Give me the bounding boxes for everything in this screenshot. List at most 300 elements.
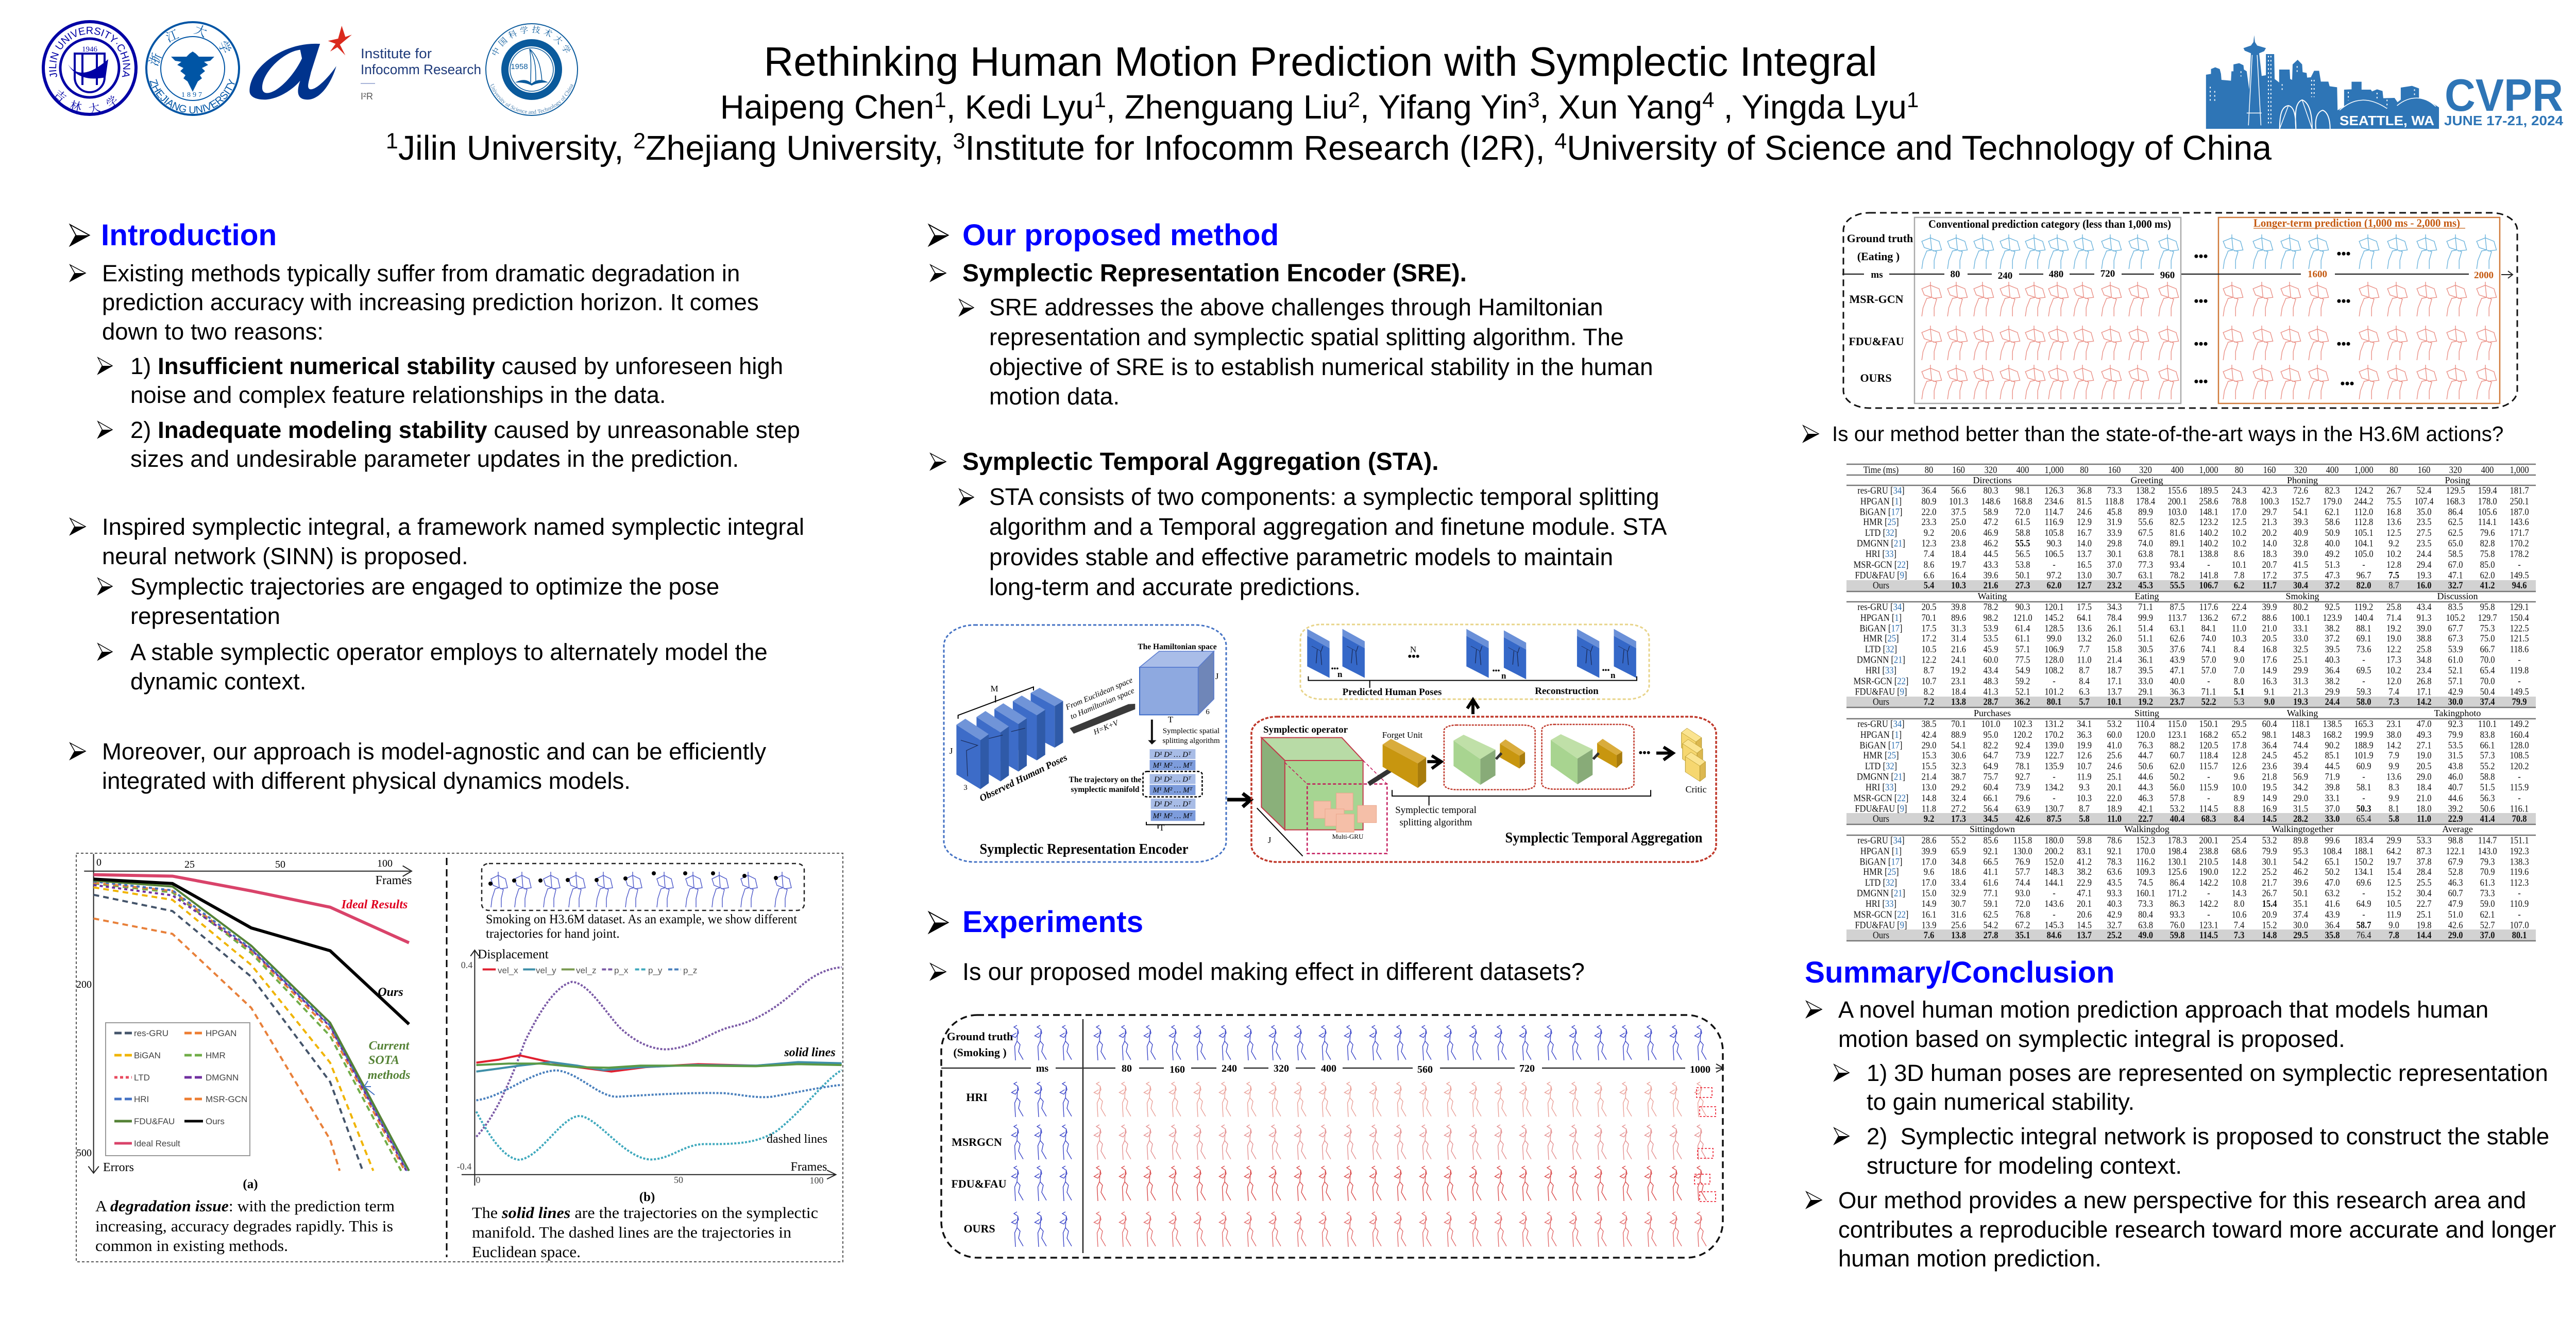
table chrome: rules, grey rows and category names: Purchases xyxy=(1974,708,2011,718)
table: sittingdown walkingdog walkingtogether average: 86.3 xyxy=(2170,898,2184,909)
text block: operator: A stable symplectic operator employs to alternately model the xyxy=(130,639,768,665)
table: purchases sitting walking takingphoto: 13.0 xyxy=(1922,782,1936,793)
table chrome: rules, grey rows and category names: Greeting xyxy=(2131,475,2163,485)
panel: symplectic representation encoder: M xyxy=(990,684,998,694)
table: sittingdown walkingdog walkingtogether average: 41.6 xyxy=(2325,898,2340,909)
table: directions greeting phoning posing: 143.6 xyxy=(2510,516,2529,528)
table: waiting eating smoking discussion: HMR [25] xyxy=(1863,633,1899,644)
table: directions greeting phoning posing: 8.6 xyxy=(1924,559,1934,570)
table: purchases sitting walking takingphoto: 130.7 xyxy=(2044,803,2064,814)
authors: , Xun Yang xyxy=(1539,88,1702,126)
table: purchases sitting walking takingphoto: 14.9 xyxy=(2262,792,2277,803)
table: time header: 160 xyxy=(2263,464,2276,475)
table: directions greeting phoning posing: 138.2 xyxy=(2136,485,2155,496)
table: waiting eating smoking discussion: 7.3 xyxy=(2388,696,2399,707)
table: purchases sitting walking takingphoto: 108.5 xyxy=(2510,750,2529,761)
panel: symplectic representation encoder: D¹ D² … Dᵀ xyxy=(1154,751,1192,759)
table: sittingdown walkingdog walkingtogether average: 33.4 xyxy=(1951,877,1966,888)
table: directions greeting phoning posing: 62.1 xyxy=(2325,506,2340,517)
table chrome: rules, grey rows and category names: Discussion xyxy=(2437,591,2478,601)
table: purchases sitting walking takingphoto: 39.8 xyxy=(2325,782,2340,793)
text block: operator xyxy=(130,639,768,695)
subheading: SRE: Symplectic Representation Encoder (SRE). xyxy=(962,260,1467,287)
table: sittingdown walkingdog walkingtogether average: 61.3 xyxy=(2480,877,2495,888)
table: directions greeting phoning posing: 81.5 xyxy=(2077,495,2092,506)
panel: predicted poses and reconstruction: Predicted Human Poses xyxy=(1343,687,1442,698)
text block: reason two xyxy=(130,417,800,472)
table: purchases sitting walking takingphoto: 58.1 xyxy=(2357,782,2371,793)
table: directions greeting phoning posing: 12.5 xyxy=(2232,516,2246,528)
table: waiting eating smoking discussion: 54.9 xyxy=(2015,665,2030,676)
table: waiting eating smoking discussion: 14.9 xyxy=(2262,665,2277,676)
table: directions greeting phoning posing: 45.8 xyxy=(2107,506,2122,517)
table: directions greeting phoning posing: 258.6 xyxy=(2199,495,2218,506)
table: purchases sitting walking takingphoto: 149.2 xyxy=(2510,718,2529,730)
table: directions greeting phoning posing: 79.6 xyxy=(2480,527,2495,538)
table: waiting eating smoking discussion: 64.1 xyxy=(2077,612,2092,623)
table: directions greeting phoning posing: 62.5 xyxy=(2448,516,2463,528)
table: sittingdown walkingdog walkingtogether average: 10.8 xyxy=(2232,877,2246,888)
panel: symplectic representation encoder: Observed Human Poses xyxy=(978,752,1069,804)
table: purchases sitting walking takingphoto: 139.0 xyxy=(2044,739,2064,751)
icon: heading arrow xyxy=(929,912,948,933)
table: waiting eating smoking discussion: 57.0 xyxy=(2201,665,2216,676)
panel: symplectic temporal aggregation: Symplectic Temporal Aggregation xyxy=(1505,830,1703,846)
table: directions greeting phoning posing: HRI [33] xyxy=(1866,548,1896,560)
table: sittingdown walkingdog walkingtogether average: 92.1 xyxy=(1984,845,1998,856)
table: purchases sitting walking takingphoto: 110.4 xyxy=(2136,718,2155,730)
chart: displacement trajectories: Displacement xyxy=(478,948,549,961)
table: waiting eating smoking discussion: - xyxy=(2053,675,2056,686)
table: waiting eating smoking discussion: 8.2 xyxy=(1924,686,1934,697)
table: purchases sitting walking takingphoto: 14.2 xyxy=(2386,739,2401,751)
table: directions greeting phoning posing: 123.2 xyxy=(2199,516,2218,528)
icon: bullet arrow xyxy=(98,421,112,438)
table: sittingdown walkingdog walkingtogether average: 14.8 xyxy=(2232,856,2246,867)
timeline axis xyxy=(941,1063,1723,1075)
table: waiting eating smoking discussion: 40.3 xyxy=(2325,654,2340,665)
table: purchases sitting walking takingphoto: 33.1 xyxy=(2325,792,2340,803)
caption: solid and dashed lines: The solid lines are the trajectories on the symplectic xyxy=(472,1204,818,1222)
table: purchases sitting walking takingphoto: 19.0 xyxy=(2417,750,2431,761)
table: sittingdown walkingdog walkingtogether average: 7.3 xyxy=(2234,929,2244,941)
table: directions greeting phoning posing: 58.5 xyxy=(2448,548,2463,560)
affiliations: Institute for Infocomm Research (I2R), xyxy=(965,129,1554,167)
text block: novel approach xyxy=(1838,996,2488,1052)
table: directions greeting phoning posing: 55.5 xyxy=(2170,580,2184,591)
table: waiting eating smoking discussion: 34.8 xyxy=(2417,654,2431,665)
table: directions greeting phoning posing: 18.3 xyxy=(2262,548,2277,560)
table: waiting eating smoking discussion: 88.1 xyxy=(2357,622,2371,634)
table: purchases sitting walking takingphoto: - xyxy=(2207,771,2210,782)
table: waiting eating smoking discussion: 39.0 xyxy=(2417,622,2431,634)
table: directions greeting phoning posing: 74.0 xyxy=(2138,537,2153,549)
figure: eating comparison: ••• xyxy=(2340,376,2354,391)
text block: trajectories: representation xyxy=(130,603,280,629)
icon: bullet arrow xyxy=(1806,1001,1822,1018)
text block: existing methods xyxy=(102,260,759,345)
authors: , Yifang Yin xyxy=(1360,88,1528,126)
table: directions greeting phoning posing: 104.1 xyxy=(2354,537,2374,549)
table: directions greeting phoning posing: 103.0 xyxy=(2167,506,2187,517)
table: sittingdown walkingdog walkingtogether average: - xyxy=(2053,887,2056,899)
table: waiting eating smoking discussion: 22.4 xyxy=(2232,601,2246,613)
table: sittingdown walkingdog walkingtogether average: 8.0 xyxy=(2234,898,2244,909)
table: directions greeting phoning posing: 234.6 xyxy=(2044,495,2064,506)
timeline axis: 160 xyxy=(1170,1064,1185,1075)
legend: chart a: BiGAN xyxy=(134,1051,161,1060)
table: waiting eating smoking discussion: 31.4 xyxy=(1951,633,1966,644)
table chrome: rules, grey rows and category names: Phoning xyxy=(2287,475,2318,485)
table: sittingdown walkingdog walkingtogether average: 17.0 xyxy=(1922,856,1936,867)
table: purchases sitting walking takingphoto: - xyxy=(2053,792,2056,803)
chart: displacement trajectories: 50 xyxy=(674,1175,683,1185)
table: directions greeting phoning posing: 53.8 xyxy=(2015,559,2030,570)
table: directions greeting phoning posing: 58.6 xyxy=(2325,516,2340,528)
table: purchases sitting walking takingphoto: 57.8 xyxy=(2170,792,2184,803)
text block: moreover xyxy=(102,738,766,794)
table: waiting eating smoking discussion: LTD [32] xyxy=(1865,644,1897,655)
table: sittingdown walkingdog walkingtogether average: 53.3 xyxy=(2417,835,2431,846)
table: sittingdown walkingdog walkingtogether average: 10.5 xyxy=(2386,898,2401,909)
text block: perspective: human motion prediction. xyxy=(1838,1245,2102,1272)
table: waiting eating smoking discussion: 48.3 xyxy=(1984,675,1998,686)
table: purchases sitting walking takingphoto: 135.9 xyxy=(2044,760,2064,772)
table: waiting eating smoking discussion: - xyxy=(2518,654,2521,665)
table: waiting eating smoking discussion: 13.7 xyxy=(2107,686,2122,697)
table: waiting eating smoking discussion: 128.0 xyxy=(2044,654,2064,665)
table: purchases sitting walking takingphoto: 150.1 xyxy=(2199,718,2218,730)
table: directions greeting phoning posing: LTD [32] xyxy=(1865,527,1897,538)
table: waiting eating smoking discussion: 51.1 xyxy=(2138,633,2153,644)
table: purchases sitting walking takingphoto: 63.9 xyxy=(2015,803,2030,814)
table chrome: rules, grey rows and category names: Posing xyxy=(2445,475,2470,485)
chart: displacement trajectories: vel_y xyxy=(536,966,556,975)
table: waiting eating smoking discussion: 40.0 xyxy=(2170,675,2184,686)
table: waiting eating smoking discussion: 10.3 xyxy=(2232,633,2246,644)
panel: symplectic representation encoder: Symplectic spatial xyxy=(1163,727,1219,735)
text block: reason two: sizes and undesirable parameter updates in the prediction. xyxy=(130,446,739,472)
table: purchases sitting walking takingphoto: 73.9 xyxy=(2015,750,2030,761)
table: waiting eating smoking discussion: 71.1 xyxy=(2201,686,2216,697)
table: sittingdown walkingdog walkingtogether average: 14.4 xyxy=(2417,929,2431,941)
table: directions greeting phoning posing: 33.9 xyxy=(2107,527,2122,538)
table: directions greeting phoning posing: 178.2 xyxy=(2510,548,2529,560)
table: directions greeting phoning posing: - xyxy=(2207,559,2210,570)
table: directions greeting phoning posing: 37.5 xyxy=(1951,506,1966,517)
table: purchases sitting walking takingphoto: 10.3 xyxy=(2077,792,2092,803)
table: directions greeting phoning posing: 37.2 xyxy=(2325,580,2340,591)
table: waiting eating smoking discussion: 119.2 xyxy=(2354,601,2373,613)
table: purchases sitting walking takingphoto: 29.0 xyxy=(2293,792,2308,803)
table: purchases sitting walking takingphoto: 18.0 xyxy=(2417,803,2431,814)
table: waiting eating smoking discussion: 29.1 xyxy=(2138,686,2153,697)
table: sittingdown walkingdog walkingtogether average: 30.7 xyxy=(1951,898,1966,909)
table: directions greeting phoning posing: 37.0 xyxy=(2107,559,2122,570)
table: directions greeting phoning posing: 32.8 xyxy=(2293,537,2308,549)
table: sittingdown walkingdog walkingtogether average: 25.1 xyxy=(2417,908,2431,920)
panel: predicted poses and reconstruction: n xyxy=(1337,669,1343,679)
table: directions greeting phoning posing: 72.6 xyxy=(2293,485,2308,496)
table: purchases sitting walking takingphoto: 64.7 xyxy=(1984,750,1998,761)
table: purchases sitting walking takingphoto: 160.4 xyxy=(2510,729,2529,740)
icon: bullet arrow xyxy=(959,489,974,505)
table: waiting eating smoking discussion: - xyxy=(2362,675,2365,686)
table: directions greeting phoning posing: 7.4 xyxy=(1924,548,1934,560)
table: waiting eating smoking discussion: 38.2 xyxy=(2325,675,2340,686)
table: directions greeting phoning posing: 63.1 xyxy=(2138,569,2153,581)
table chrome: rules, grey rows and category names: Eating xyxy=(2135,591,2159,601)
table chrome: rules, grey rows and category names: Walkingdog xyxy=(2124,824,2170,834)
table: directions greeting phoning posing: 178.4 xyxy=(2136,495,2155,506)
table: purchases sitting walking takingphoto: 22.7 xyxy=(2138,813,2153,824)
table: purchases sitting walking takingphoto: LTD [32] xyxy=(1865,760,1897,772)
table: time header: 1,000 xyxy=(2199,464,2218,475)
table: sittingdown walkingdog walkingtogether average: 238.8 xyxy=(2199,845,2218,856)
table: waiting eating smoking discussion: 31.3 xyxy=(1951,622,1966,634)
table: sittingdown walkingdog walkingtogether average: 49.0 xyxy=(2138,929,2153,941)
table: sittingdown walkingdog walkingtogether average: 16.1 xyxy=(1922,908,1936,920)
table: waiting eating smoking discussion: 74.1 xyxy=(2201,644,2216,655)
table: purchases sitting walking takingphoto: 101.9 xyxy=(2354,750,2374,761)
table: directions greeting phoning posing: 149.5 xyxy=(2510,569,2529,581)
table: waiting eating smoking discussion: 89.6 xyxy=(1951,612,1966,623)
table: purchases sitting walking takingphoto: 88.2 xyxy=(2170,739,2184,751)
panel: predicted poses and reconstruction: n xyxy=(1501,671,1506,681)
table: waiting eating smoking discussion: 19.2 xyxy=(1951,665,1966,676)
table: purchases sitting walking takingphoto: 36.3 xyxy=(2077,729,2092,740)
panel: symplectic representation encoder: Symplectic Representation Encoder xyxy=(980,841,1188,857)
table: sittingdown walkingdog walkingtogether average: 148.3 xyxy=(2044,866,2064,877)
table: waiting eating smoking discussion: 42.9 xyxy=(2448,686,2463,697)
table: purchases sitting walking takingphoto: 74.4 xyxy=(2293,739,2308,751)
table: sittingdown walkingdog walkingtogether average: 58.7 xyxy=(2357,919,2371,931)
table: sittingdown walkingdog walkingtogether average: 15.4 xyxy=(2262,898,2277,909)
table: directions greeting phoning posing: 93.4 xyxy=(2170,559,2184,570)
table: waiting eating smoking discussion: 8.4 xyxy=(2234,644,2244,655)
panel: symplectic representation encoder: M¹ M² … Mᵀ xyxy=(1153,786,1193,794)
table: purchases sitting walking takingphoto: 11.0 xyxy=(2107,813,2122,824)
table: sittingdown walkingdog walkingtogether average: 30.0 xyxy=(2293,919,2308,931)
table: directions greeting phoning posing: 20.2 xyxy=(2262,527,2277,538)
table: sittingdown walkingdog walkingtogether average: 18.6 xyxy=(1951,866,1966,877)
authors: 2 xyxy=(1348,88,1360,112)
table: directions greeting phoning posing: res-GRU [34] xyxy=(1857,485,1905,496)
table: directions greeting phoning posing: 46.2 xyxy=(1984,537,1998,549)
table: purchases sitting walking takingphoto: 9.6 xyxy=(2234,771,2244,782)
table: directions greeting phoning posing: 63.8 xyxy=(2138,548,2153,560)
table: sittingdown walkingdog walkingtogether average: 35.8 xyxy=(2325,929,2340,941)
icon: bullet arrow xyxy=(930,963,946,980)
table: sittingdown walkingdog walkingtogether average: 114.5 xyxy=(2199,929,2218,941)
table: purchases sitting walking takingphoto: 40.7 xyxy=(2448,782,2463,793)
table: sittingdown walkingdog walkingtogether average: 59.1 xyxy=(1984,898,1998,909)
table: sittingdown walkingdog walkingtogether average: 130.0 xyxy=(2013,845,2032,856)
table: purchases sitting walking takingphoto: 66.1 xyxy=(2480,739,2495,751)
logo: CVPR 2024 Seattle xyxy=(2206,35,2564,129)
table: waiting eating smoking discussion: 5.3 xyxy=(2234,696,2244,707)
table: waiting eating smoking discussion: 43.4 xyxy=(1984,665,1998,676)
table: sittingdown walkingdog walkingtogether average: 79.9 xyxy=(2262,845,2277,856)
logo: Zhejiang University: ZHEJIANG UNIVERSITY xyxy=(149,78,235,113)
table: sittingdown walkingdog walkingtogether average: HPGAN [1] xyxy=(1860,845,1902,856)
timeline axis: ms xyxy=(1036,1063,1048,1074)
table: purchases sitting walking takingphoto: 24.5 xyxy=(2262,750,2277,761)
table: waiting eating smoking discussion: 17.5 xyxy=(2077,601,2092,613)
table: directions greeting phoning posing: 82.8 xyxy=(2480,537,2495,549)
timeline axis: 400 xyxy=(1321,1063,1336,1074)
table: directions greeting phoning posing: 97.2 xyxy=(2047,569,2061,581)
table: waiting eating smoking discussion: 20.5 xyxy=(2262,633,2277,644)
panel: symplectic representation encoder: H=K+V xyxy=(1092,719,1121,737)
table: directions greeting phoning posing: 187.0 xyxy=(2510,506,2529,517)
table: purchases sitting walking takingphoto: 27.1 xyxy=(2417,739,2431,751)
logo: University of Science and Technology of China xyxy=(485,23,578,116)
logo: CVPR 2024 Seattle: JUNE 17-21, 2024 xyxy=(2444,113,2564,128)
heading: introduction: Introduction xyxy=(101,218,277,252)
table: directions greeting phoning posing: 10.1 xyxy=(2232,559,2246,570)
table: sittingdown walkingdog walkingtogether average: 13.8 xyxy=(1951,929,1966,941)
table: waiting eating smoking discussion: 70.0 xyxy=(2480,675,2495,686)
table: waiting eating smoking discussion: 50.4 xyxy=(2480,686,2495,697)
table: directions greeting phoning posing: 47.3 xyxy=(2325,569,2340,581)
text block: point two: 2) Symplectic integral network is proposed to construct the stable xyxy=(1867,1123,2549,1149)
table: directions greeting phoning posing: 148.6 xyxy=(1981,495,2001,506)
table: sittingdown walkingdog walkingtogether average: 15.2 xyxy=(2262,919,2277,931)
table: directions greeting phoning posing: 29.7 xyxy=(2262,506,2277,517)
table: waiting eating smoking discussion: 117.6 xyxy=(2199,601,2218,613)
table: directions greeting phoning posing: Ours xyxy=(1873,580,1889,591)
table: directions greeting phoning posing: 46.9 xyxy=(1984,527,1998,538)
table: purchases sitting walking takingphoto: 92.7 xyxy=(2015,771,2030,782)
table: waiting eating smoking discussion: - xyxy=(2518,675,2521,686)
table: directions greeting phoning posing: 159.4 xyxy=(2478,485,2497,496)
table: directions greeting phoning posing: 55.5 xyxy=(2015,537,2030,549)
table: purchases sitting walking takingphoto: 9.2 xyxy=(1924,813,1934,824)
panel: symplectic temporal aggregation: Critic xyxy=(1686,784,1707,794)
table: time header: 1,000 xyxy=(2354,464,2374,475)
table: directions greeting phoning posing: 78.8 xyxy=(2232,495,2246,506)
text block: perspective xyxy=(1838,1187,2556,1272)
table: sittingdown walkingdog walkingtogether average: 143.0 xyxy=(2478,845,2497,856)
table: waiting eating smoking discussion: 99.9 xyxy=(2138,612,2153,623)
table: waiting eating smoking discussion: 51.4 xyxy=(2138,622,2153,634)
table: purchases sitting walking takingphoto: FDU&FAU [9] xyxy=(1855,803,1907,814)
table: sittingdown walkingdog walkingtogether average: 76.8 xyxy=(2015,908,2030,920)
table: waiting eating smoking discussion: 31.3 xyxy=(2293,675,2308,686)
table: sittingdown walkingdog walkingtogether average: 180.0 xyxy=(2044,835,2064,846)
table: waiting eating smoking discussion: 87.5 xyxy=(2170,601,2184,613)
chart: degradation curves: Current xyxy=(369,1039,410,1053)
table: waiting eating smoking discussion: 36.2 xyxy=(2015,696,2030,707)
table: sittingdown walkingdog walkingtogether average: 15.4 xyxy=(2386,866,2401,877)
authors: , Zhenguang Liu xyxy=(1106,88,1348,126)
chart: degradation curves: methods xyxy=(368,1069,410,1082)
table: directions greeting phoning posing: 105.1 xyxy=(2354,527,2374,538)
table: time header: 80 xyxy=(2080,464,2089,475)
panel: symplectic representation encoder: From Euclidean space xyxy=(1064,675,1134,712)
table: sittingdown walkingdog walkingtogether average: 46.3 xyxy=(2448,877,2463,888)
table: time header: 320 xyxy=(1985,464,1997,475)
table: directions greeting phoning posing: 29.4 xyxy=(2417,559,2431,570)
figure: eating comparison: ••• xyxy=(2336,294,2351,309)
table: sittingdown walkingdog walkingtogether average: 171.2 xyxy=(2167,887,2187,899)
table: waiting eating smoking discussion: 63.1 xyxy=(2170,622,2184,634)
table: directions greeting phoning posing: 39.6 xyxy=(1984,569,1998,581)
table: directions greeting phoning posing: 23.5 xyxy=(2417,516,2431,528)
table: directions greeting phoning posing: 16.5 xyxy=(2077,559,2092,570)
table: directions greeting phoning posing: 62.0 xyxy=(2480,569,2495,581)
timeline axis: ms xyxy=(1871,269,1883,280)
table: sittingdown walkingdog walkingtogether average: 59.8 xyxy=(2077,835,2092,846)
table: sittingdown walkingdog walkingtogether average: 50.1 xyxy=(2293,887,2308,899)
table: waiting eating smoking discussion: MSR-GCN [22] xyxy=(1854,675,1908,686)
table: waiting eating smoking discussion: 37.2 xyxy=(2325,633,2340,644)
table: directions greeting phoning posing: 89.9 xyxy=(2138,506,2153,517)
icon: bullet arrow xyxy=(98,644,112,660)
table: waiting eating smoking discussion: res-GRU [34] xyxy=(1857,601,1905,613)
table: sittingdown walkingdog walkingtogether average: Ours xyxy=(1873,929,1889,941)
table: waiting eating smoking discussion: 108.2 xyxy=(2044,665,2064,676)
table: directions greeting phoning posing: 51.3 xyxy=(2325,559,2340,570)
table chrome: rules, grey rows and category names: Directions xyxy=(1973,475,2011,485)
table: waiting eating smoking discussion: 10.5 xyxy=(1922,644,1936,655)
table: directions greeting phoning posing: 118.8 xyxy=(2105,495,2124,506)
table: waiting eating smoking discussion: 37.4 xyxy=(2480,696,2495,707)
table: sittingdown walkingdog walkingtogether average: 183.4 xyxy=(2354,835,2374,846)
text block: point one xyxy=(1867,1060,2548,1115)
table: waiting eating smoking discussion: 128.5 xyxy=(2044,622,2064,634)
table: purchases sitting walking takingphoto: 66.1 xyxy=(1984,792,1998,803)
table: purchases sitting walking takingphoto: 71.9 xyxy=(2325,771,2340,782)
table: directions greeting phoning posing: 23.3 xyxy=(1922,516,1936,528)
caption: degradation issue: A degradation issue: with the prediction term xyxy=(95,1197,395,1215)
table: sittingdown walkingdog walkingtogether average: 67.2 xyxy=(2015,919,2030,931)
table: directions greeting phoning posing: 61.5 xyxy=(2015,516,2030,528)
panel: symplectic representation encoder: M¹ M² … Mᵀ xyxy=(1153,762,1193,770)
chart: displacement trajectories xyxy=(457,948,842,1186)
table: time header: 400 xyxy=(2326,464,2338,475)
table: purchases sitting walking takingphoto: 14.5 xyxy=(2262,813,2277,824)
timeline axis: 80 xyxy=(1122,1063,1132,1074)
table: sittingdown walkingdog walkingtogether average: 73.3 xyxy=(2138,898,2153,909)
table: directions greeting phoning posing: 41.5 xyxy=(2293,559,2308,570)
row labels: FDU&FAU xyxy=(1849,335,1904,348)
table: directions greeting phoning posing: 6.6 xyxy=(1924,569,1934,581)
panel: symplectic representation encoder: 3 xyxy=(963,784,968,792)
table: directions greeting phoning posing: 250.1 xyxy=(2510,495,2529,506)
table: sittingdown walkingdog walkingtogether average: 119.6 xyxy=(2510,866,2529,877)
table: directions greeting phoning posing: 6.2 xyxy=(2234,580,2244,591)
table: directions greeting phoning posing: 89.1 xyxy=(2170,537,2184,549)
table: directions greeting phoning posing: 124.2 xyxy=(2354,485,2374,496)
chart: displacement trajectories: 0.4 xyxy=(461,960,472,970)
table: purchases sitting walking takingphoto: 168.2 xyxy=(2199,729,2218,740)
table: purchases sitting walking takingphoto: 8.9 xyxy=(2234,792,2244,803)
table: sittingdown walkingdog walkingtogether average: 188.1 xyxy=(2354,845,2374,856)
table: purchases sitting walking takingphoto: 120.2 xyxy=(2013,729,2032,740)
table: purchases sitting walking takingphoto: 49.3 xyxy=(2417,729,2431,740)
text block: inspired: neural network (SINN) is proposed. xyxy=(102,543,468,569)
table: sittingdown walkingdog walkingtogether average: 61.6 xyxy=(1984,877,1998,888)
table: waiting eating smoking discussion: 36.4 xyxy=(2325,665,2340,676)
table: waiting eating smoking discussion: 21.4 xyxy=(2107,654,2122,665)
table: purchases sitting walking takingphoto: 50.3 xyxy=(2357,803,2371,814)
table: purchases sitting walking takingphoto: BiGAN [17] xyxy=(1860,739,1902,751)
table: time header: 320 xyxy=(2294,464,2307,475)
chart: degradation curves: Frames xyxy=(376,874,412,887)
table: directions greeting phoning posing: 39.0 xyxy=(2293,548,2308,560)
